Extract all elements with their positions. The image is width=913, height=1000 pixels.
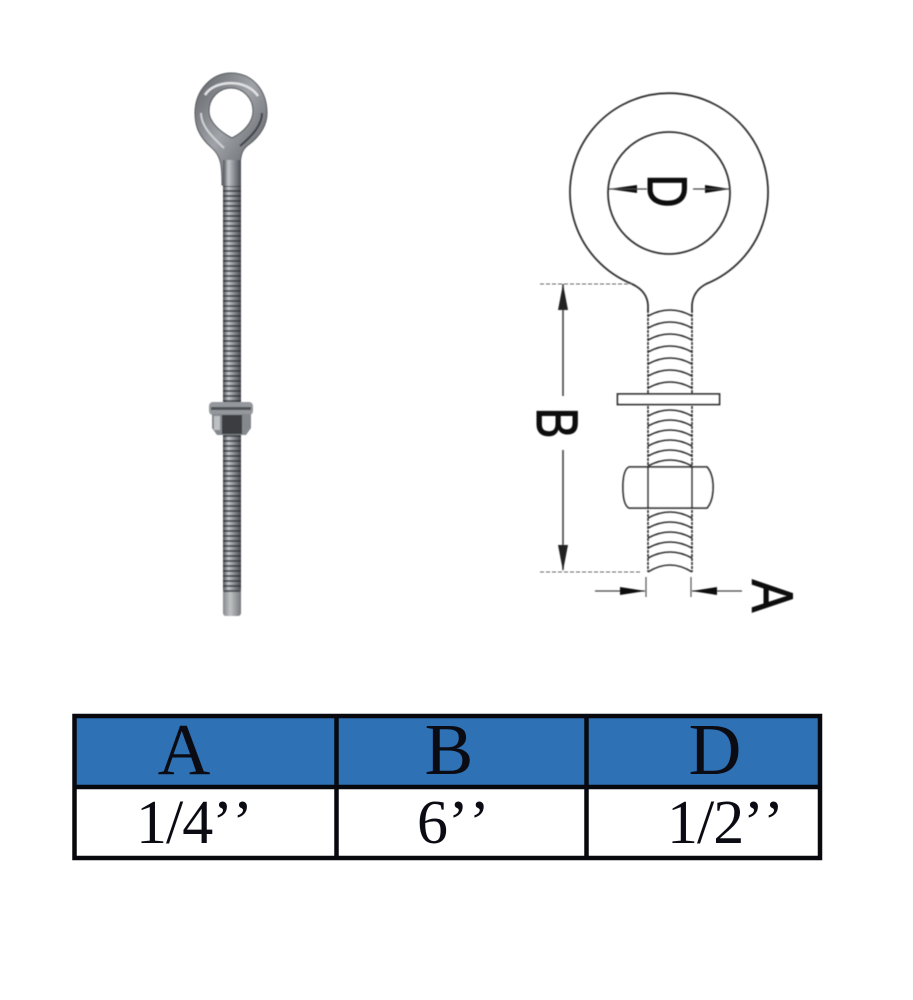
header B: B	[425, 709, 473, 790]
photo: stainless eye bolt with nut	[195, 73, 267, 616]
eye outline	[570, 93, 768, 312]
dimension D	[609, 174, 730, 208]
threaded shaft	[223, 160, 241, 616]
thread arcs	[648, 310, 692, 572]
hex nut and washer	[209, 402, 253, 435]
dimensions table	[74, 709, 820, 858]
eye ring	[195, 73, 267, 185]
header D: D	[689, 709, 741, 790]
value B: 6’’	[417, 789, 490, 857]
table header band	[74, 716, 820, 787]
dimension B	[524, 284, 640, 572]
table grid	[74, 716, 820, 858]
technical drawing of eye bolt	[524, 93, 804, 613]
value A: 1/4’’	[136, 789, 252, 857]
dimension A	[595, 577, 804, 613]
table body	[74, 787, 820, 858]
washer	[618, 394, 720, 404]
value D: 1/2’’	[667, 789, 783, 857]
dimension D: D	[636, 174, 698, 208]
dimension A: A	[739, 580, 804, 613]
dimension B: B	[524, 408, 589, 438]
header A: A	[158, 709, 211, 790]
hex nut	[623, 467, 713, 508]
